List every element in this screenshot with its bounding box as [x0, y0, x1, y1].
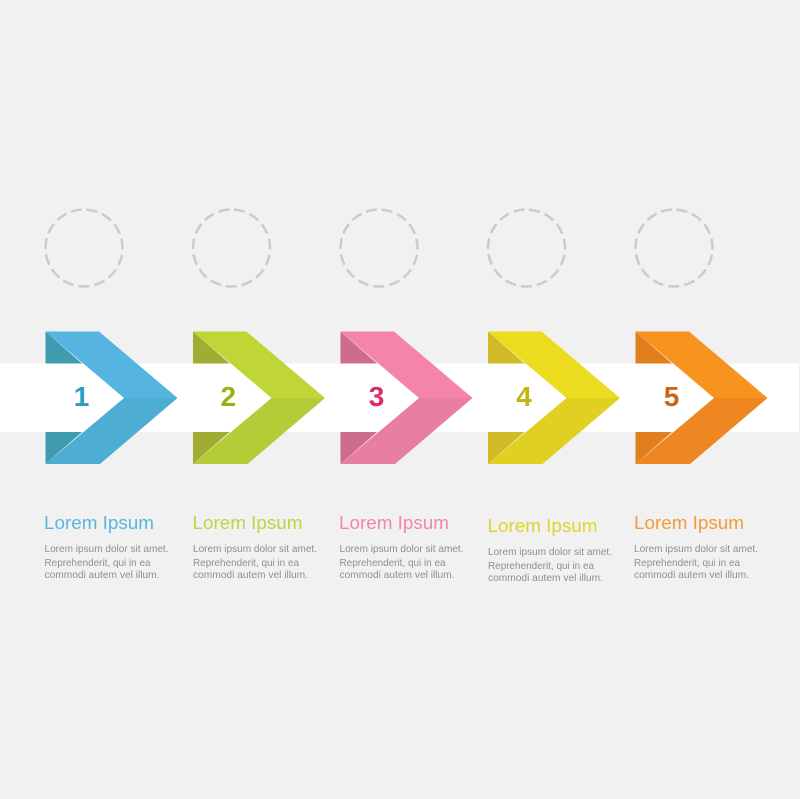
- step 3 arrow: [340, 332, 472, 464]
- text block 5: commodi autem vel illum.: [634, 569, 749, 581]
- step 2 arrow: [193, 332, 325, 464]
- text block 5: Lorem ipsum dolor sit amet.: [634, 543, 758, 555]
- dashed circle placeholder 4: [488, 210, 565, 286]
- text block 3: commodi autem vel illum.: [340, 569, 454, 581]
- text block 5: Reprehenderit, qui in ea: [634, 557, 740, 569]
- text block 1: commodi autem vel illum.: [44, 569, 160, 581]
- step number 2: 2: [221, 381, 236, 412]
- step 4 arrow: [488, 332, 620, 464]
- text block 2: Lorem ipsum dolor sit amet.: [193, 543, 317, 555]
- step number 5: 5: [664, 381, 679, 412]
- text block 4: [488, 516, 612, 584]
- step number 1: 1: [74, 381, 89, 412]
- dashed circle placeholder 1: [46, 210, 122, 286]
- text block 2: [192, 513, 317, 581]
- text block 3: Lorem Ipsum: [339, 513, 449, 533]
- text block 1: [44, 513, 168, 581]
- text block 4: commodi autem vel illum.: [488, 572, 603, 584]
- dashed circle placeholder 3: [340, 210, 418, 286]
- text block 2: Reprehenderit, qui in ea: [193, 557, 299, 569]
- step number 4: 4: [516, 381, 532, 412]
- text block 1: Lorem Ipsum: [44, 513, 154, 533]
- dashed circle placeholder 5: [636, 210, 712, 286]
- step number 3: 3: [369, 381, 384, 412]
- dashed circle placeholder 2: [193, 210, 270, 286]
- step 5 arrow: [636, 332, 768, 464]
- text block 1: Lorem ipsum dolor sit amet.: [44, 543, 168, 555]
- text block 2: Lorem Ipsum: [192, 513, 302, 533]
- text block 4: Lorem ipsum dolor sit amet.: [488, 546, 612, 558]
- text block 5: [634, 513, 758, 581]
- text block 3: Reprehenderit, qui in ea: [340, 557, 446, 569]
- text block 4: Reprehenderit, qui in ea: [488, 560, 594, 572]
- text block 3: [339, 513, 464, 581]
- step 1 arrow: [46, 332, 178, 464]
- text block 2: commodi autem vel illum.: [193, 569, 308, 581]
- text block 5: Lorem Ipsum: [634, 513, 744, 533]
- white timeline band: [0, 364, 799, 432]
- text block 3: Lorem ipsum dolor sit amet.: [340, 543, 464, 555]
- text block 4: Lorem Ipsum: [488, 516, 598, 536]
- text block 1: Reprehenderit, qui in ea: [44, 557, 151, 569]
